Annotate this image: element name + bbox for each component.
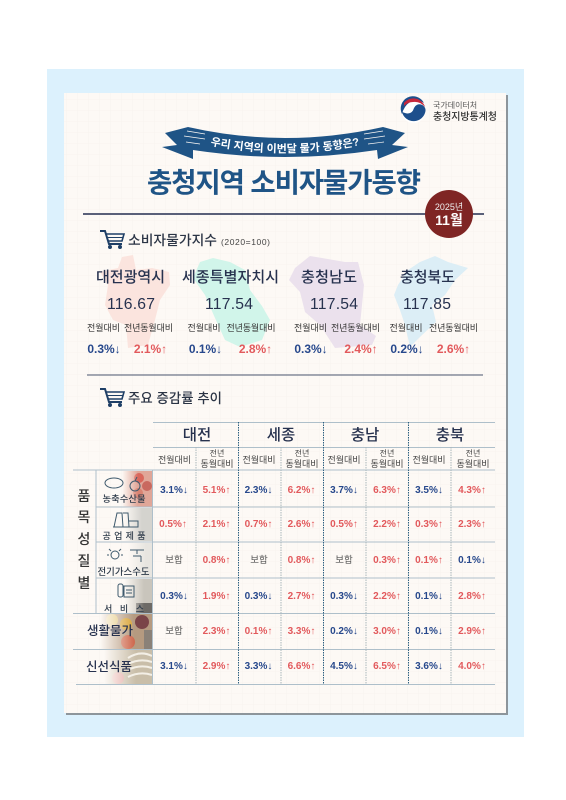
row label: electricity gas water bbox=[98, 549, 150, 577]
table header: comparison columns: 전년 bbox=[295, 448, 309, 458]
region: Chungbuk: 충청북도 bbox=[400, 269, 455, 286]
icon: bulb and faucet bbox=[107, 549, 144, 562]
row values: services: 0.3%↓ bbox=[330, 591, 358, 602]
card bbox=[64, 93, 508, 715]
row values: agricultural products: 6.2%↑ bbox=[288, 485, 315, 496]
region: Chungnam: 충청남도 bbox=[301, 269, 357, 286]
logo: statistics office bbox=[401, 96, 497, 123]
row values: agricultural products: 2.3%↓ bbox=[245, 485, 272, 496]
region: Daejeon: 0.3%↓ bbox=[87, 342, 121, 356]
row values: fresh food bbox=[160, 661, 486, 672]
header rule bbox=[83, 213, 484, 215]
row values: agricultural products: 5.1%↑ bbox=[203, 485, 230, 496]
region: Sejong: 117.54 bbox=[205, 296, 253, 313]
section heading: CPI: 소비자물가지수 bbox=[128, 233, 217, 248]
table header: comparison columns: 동월대비 bbox=[456, 458, 490, 469]
region: Chungnam: 2.4%↑ bbox=[344, 342, 378, 356]
ribbon banner: 우리 지역의 이번달 물가 동향은? bbox=[211, 137, 358, 154]
ribbon banner bbox=[162, 127, 408, 159]
row values: living prices bbox=[165, 626, 486, 637]
region: Sejong: 2.8%↑ bbox=[239, 342, 272, 356]
row label: agricultural products: 농축수산물 bbox=[102, 494, 146, 504]
section heading: CPI: (2020=100) bbox=[221, 237, 270, 247]
region: Sejong: 세종특별자치시 bbox=[182, 269, 279, 286]
row values: fresh food: 4.5%↓ bbox=[330, 661, 358, 672]
row values: electricity gas water: 0.3%↑ bbox=[373, 555, 401, 566]
row values: living prices: 보합 bbox=[165, 626, 183, 637]
map: Daejeon bbox=[100, 255, 170, 348]
table header: comparison columns: 전월대비 bbox=[327, 454, 361, 465]
region: Chungbuk bbox=[390, 269, 478, 356]
row values: fresh food: 3.3%↓ bbox=[245, 661, 272, 672]
region: Sejong: 전월대비 bbox=[188, 322, 220, 333]
row values: agricultural products: 3.1%↓ bbox=[160, 485, 188, 496]
table header: comparison columns: 전년 bbox=[380, 448, 394, 458]
date badge bbox=[425, 190, 473, 238]
table header: comparison columns: 전년 bbox=[210, 448, 224, 458]
row values: industrial products bbox=[159, 519, 486, 530]
row label: agricultural products bbox=[102, 477, 146, 504]
row values: fresh food: 4.0%↑ bbox=[458, 661, 486, 672]
side label: by item nature: 별 bbox=[78, 575, 90, 591]
row values: agricultural products: 3.7%↓ bbox=[330, 485, 358, 496]
icon: shopping cart bbox=[100, 389, 124, 406]
region: Daejeon: 대전광역시 bbox=[96, 269, 165, 286]
row values: living prices: 2.3%↑ bbox=[203, 626, 230, 637]
row values: fresh food: 3.1%↓ bbox=[160, 661, 188, 672]
title: 충청지역 소비자물가동향 bbox=[147, 167, 421, 198]
row values: services bbox=[160, 591, 486, 602]
row values: living prices: 3.3%↑ bbox=[288, 626, 315, 637]
row label: living prices: 생활물가 bbox=[87, 623, 133, 638]
table header: comparison columns: 전월대비 bbox=[412, 454, 446, 465]
side label: by item nature: 목 bbox=[78, 509, 91, 525]
row values: electricity gas water: 0.8%↑ bbox=[203, 555, 230, 566]
side label: by item nature: 성 bbox=[78, 531, 90, 547]
row values: industrial products: 2.3%↑ bbox=[458, 519, 486, 530]
logo: statistics office: 충청지방통계청 bbox=[433, 110, 497, 123]
row photos bbox=[100, 471, 152, 684]
region: Chungbuk: 2.6%↑ bbox=[437, 342, 470, 356]
region: Chungnam bbox=[294, 269, 380, 356]
row values: industrial products: 0.3%↑ bbox=[415, 519, 443, 530]
section heading: trends bbox=[100, 389, 222, 406]
row values: living prices: 3.0%↑ bbox=[373, 626, 401, 637]
table header: regions bbox=[183, 426, 464, 444]
row values: industrial products: 2.2%↑ bbox=[373, 519, 401, 530]
row values: services: 2.8%↑ bbox=[458, 591, 486, 602]
row values: services: 0.3%↓ bbox=[160, 591, 188, 602]
row values: fresh food: 6.5%↑ bbox=[373, 661, 401, 672]
table header: regions: 충북 bbox=[436, 426, 464, 444]
side label: by item nature: 질 bbox=[78, 553, 90, 569]
table header: regions: 충남 bbox=[351, 426, 379, 444]
table header: regions: 세종 bbox=[267, 426, 295, 444]
table header: comparison columns: 동월대비 bbox=[285, 458, 319, 469]
table grid bbox=[73, 422, 495, 684]
row values: electricity gas water: 0.8%↑ bbox=[288, 555, 315, 566]
section heading: CPI bbox=[100, 231, 270, 248]
region: Daejeon: 2.1%↑ bbox=[134, 342, 167, 356]
row values: electricity gas water: 0.1%↑ bbox=[415, 555, 443, 566]
row values: electricity gas water: 보합 bbox=[250, 555, 268, 566]
table header: regions: 대전 bbox=[183, 426, 211, 444]
region: Chungnam: 0.3%↓ bbox=[294, 342, 328, 356]
region: Sejong: 0.1%↓ bbox=[189, 342, 222, 356]
background panel bbox=[47, 69, 524, 737]
map: Sejong bbox=[193, 258, 270, 347]
icon: factory bbox=[113, 513, 138, 527]
section heading: trends: 주요 증감률 추이 bbox=[128, 391, 222, 406]
row values: electricity gas water: 보합 bbox=[335, 555, 353, 566]
icon: shopping cart bbox=[100, 231, 124, 248]
row values: fresh food: 3.6%↓ bbox=[415, 661, 443, 672]
logo: statistics office: 국가데이터처 bbox=[433, 100, 477, 110]
region: Chungnam: 전년동월대비 bbox=[331, 322, 380, 333]
region: Daejeon: 전년동월대비 bbox=[124, 322, 173, 333]
row values: agricultural products bbox=[160, 485, 486, 496]
row values: services: 0.3%↓ bbox=[245, 591, 272, 602]
row values: electricity gas water: 0.1%↓ bbox=[458, 555, 486, 566]
row values: living prices: 0.1%↑ bbox=[245, 626, 272, 637]
row values: industrial products: 2.6%↑ bbox=[288, 519, 315, 530]
table header: comparison columns: 전월대비 bbox=[158, 454, 191, 465]
region: Chungbuk: 117.85 bbox=[403, 296, 451, 313]
region: Chungbuk: 전월대비 bbox=[390, 322, 422, 333]
date badge: 2025년 bbox=[435, 202, 463, 212]
side label: by item nature: 품 bbox=[78, 488, 91, 504]
row values: services: 0.1%↓ bbox=[415, 591, 443, 602]
row label: industrial products: 공 업 제 품 bbox=[102, 530, 146, 541]
row values: agricultural products: 3.5%↓ bbox=[415, 485, 443, 496]
row values: industrial products: 0.7%↑ bbox=[245, 519, 272, 530]
region: Daejeon bbox=[87, 269, 173, 356]
region: Chungbuk: 전년동월대비 bbox=[429, 322, 478, 333]
table header: comparison columns bbox=[158, 448, 490, 469]
row values: agricultural products: 4.3%↑ bbox=[458, 485, 486, 496]
row values: industrial products: 0.5%↑ bbox=[159, 519, 187, 530]
icon: calculator bbox=[118, 584, 134, 597]
region: Chungbuk: 0.2%↓ bbox=[390, 342, 424, 356]
row label: industrial products bbox=[102, 513, 146, 541]
region: Daejeon: 116.67 bbox=[107, 296, 155, 313]
row values: agricultural products: 6.3%↑ bbox=[373, 485, 401, 496]
row label: electricity gas water: 전기가스수도 bbox=[98, 566, 150, 577]
region: Daejeon: 전월대비 bbox=[87, 322, 120, 333]
row values: electricity gas water: 보합 bbox=[165, 555, 183, 566]
row values: fresh food: 2.9%↑ bbox=[203, 661, 230, 672]
region: Sejong: 전년동월대비 bbox=[226, 322, 276, 333]
row values: living prices: 0.1%↓ bbox=[415, 626, 443, 637]
row values: services: 2.2%↑ bbox=[373, 591, 401, 602]
side label: by item nature bbox=[78, 488, 91, 591]
region: Chungnam: 전월대비 bbox=[294, 322, 327, 333]
table header: comparison columns: 전년 bbox=[466, 448, 480, 458]
row label: services: 서 비 스 bbox=[104, 603, 144, 614]
row values: living prices: 0.2%↓ bbox=[330, 626, 358, 637]
region: Sejong bbox=[182, 269, 279, 356]
row values: electricity gas water bbox=[165, 555, 486, 566]
region: Chungnam: 117.54 bbox=[310, 296, 358, 313]
row values: industrial products: 0.5%↑ bbox=[330, 519, 358, 530]
row values: services: 1.9%↑ bbox=[203, 591, 230, 602]
table header: comparison columns: 전월대비 bbox=[242, 454, 276, 465]
table header: comparison columns: 동월대비 bbox=[200, 458, 234, 469]
row label: fresh food: 신선식품 bbox=[86, 660, 132, 674]
row values: industrial products: 2.1%↑ bbox=[203, 519, 230, 530]
row values: services: 2.7%↑ bbox=[288, 591, 315, 602]
map: Chungnam bbox=[289, 256, 376, 348]
icon: piggy bank and apple bbox=[105, 477, 140, 491]
row values: fresh food: 6.6%↑ bbox=[288, 661, 315, 672]
date badge: 11월 bbox=[435, 212, 463, 228]
row values: living prices: 2.9%↑ bbox=[458, 626, 486, 637]
map: Chungbuk bbox=[394, 256, 468, 347]
table header: comparison columns: 동월대비 bbox=[370, 458, 404, 469]
row label: services bbox=[104, 584, 144, 614]
